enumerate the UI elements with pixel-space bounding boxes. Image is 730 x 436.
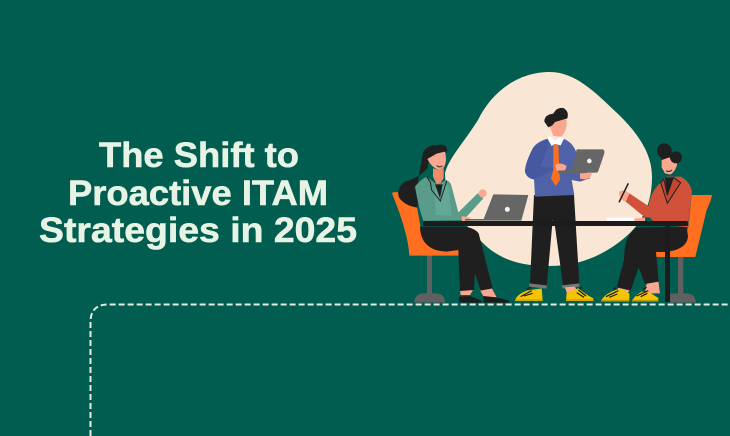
table <box>423 221 688 302</box>
standing man <box>525 108 604 287</box>
title: The Shift to <box>99 136 299 175</box>
legs: seated man <box>617 227 688 295</box>
dashed outline <box>90 304 730 436</box>
title: Strategies in 2025 <box>39 211 357 250</box>
seated man <box>607 143 712 303</box>
upper body: woman <box>398 144 487 221</box>
seated woman <box>392 144 528 303</box>
background blob <box>445 72 652 266</box>
title: Proactive ITAM <box>68 174 328 213</box>
laptop: woman <box>465 194 528 221</box>
legs: woman <box>420 227 509 303</box>
chair: woman <box>392 192 459 303</box>
shoes <box>515 283 658 301</box>
upper body: seated man <box>607 143 692 227</box>
upper body: man <box>525 108 604 197</box>
legs: man <box>530 195 579 287</box>
chair: man <box>654 195 712 303</box>
title <box>39 136 357 250</box>
